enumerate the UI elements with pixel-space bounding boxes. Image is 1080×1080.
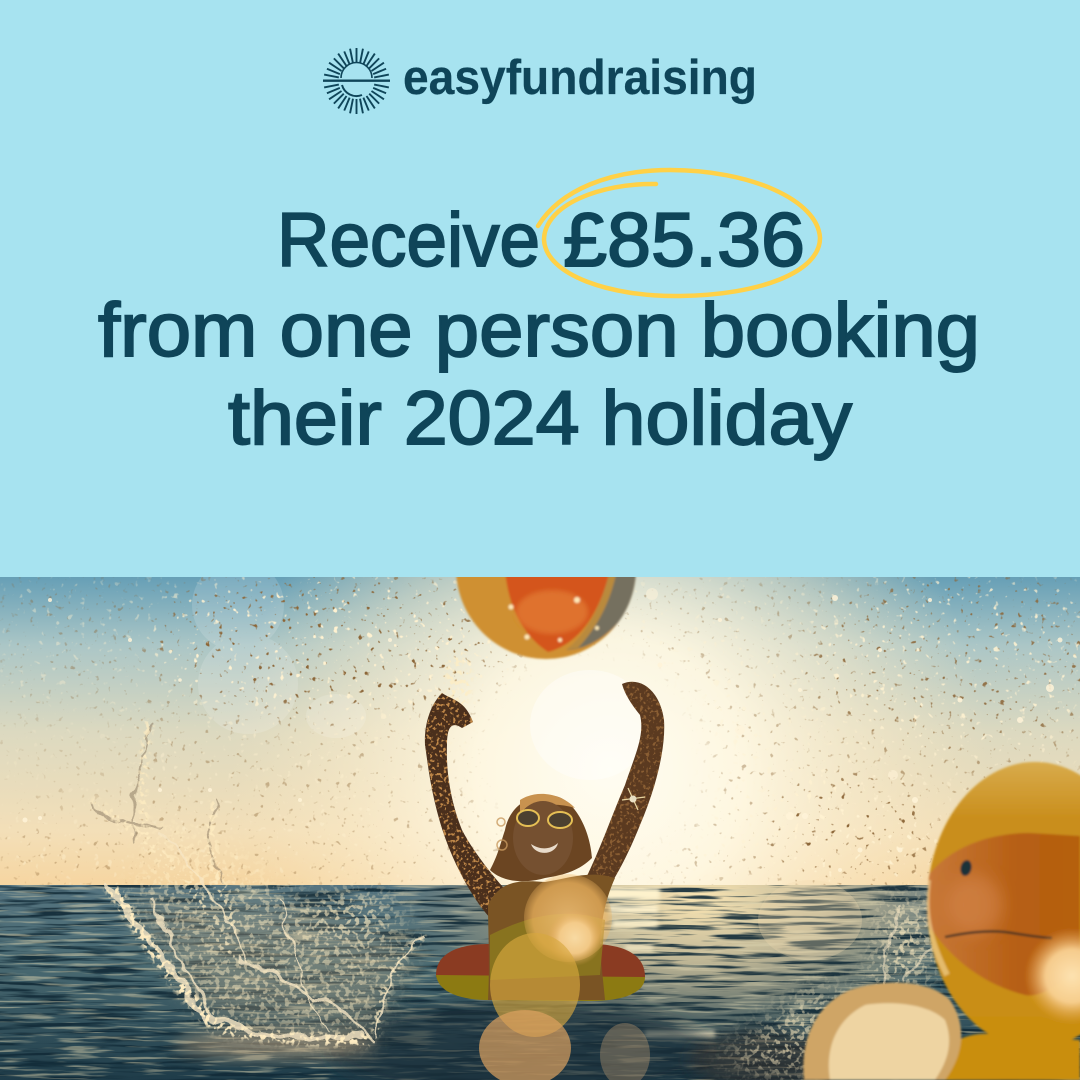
inflatable duck	[803, 762, 1080, 1080]
duck face band	[925, 833, 1080, 995]
larger droplets	[22, 588, 1062, 872]
arm droplets	[425, 682, 664, 910]
logo: easyfundraising	[323, 48, 757, 114]
sunglasses	[517, 810, 572, 828]
inflatable ring	[436, 944, 645, 1001]
dark water under the child	[330, 1000, 710, 1080]
left arm	[425, 693, 515, 925]
sea waves	[0, 885, 1080, 1080]
smile	[531, 843, 558, 853]
child	[424, 682, 664, 1001]
sky	[0, 577, 1080, 887]
wordmark: easyfundraising	[403, 51, 757, 105]
beach ball	[454, 577, 637, 661]
water droplets, fine	[0, 577, 1080, 887]
icon: sun rays	[323, 48, 390, 114]
hand-drawn circle around amount	[538, 170, 820, 296]
right arm	[585, 682, 664, 900]
duck mouth	[945, 931, 1052, 938]
water glints	[606, 888, 715, 1038]
headline	[98, 198, 980, 461]
left water splash	[92, 725, 425, 1059]
torso	[488, 875, 615, 1000]
duck flare	[1024, 928, 1080, 1024]
headline line 1: Receive	[277, 198, 540, 283]
duck body	[930, 1034, 1080, 1080]
sun glare on water	[418, 885, 938, 1034]
splash droplets	[90, 656, 945, 1080]
duck head	[927, 762, 1080, 1048]
photo: child playing in the sea at sunset	[0, 577, 1080, 1080]
hair	[490, 796, 592, 881]
pale flare behind child	[530, 670, 640, 766]
headline line 3: their 2024 holiday	[228, 376, 852, 461]
face	[513, 801, 573, 875]
sun star on arm	[622, 788, 645, 810]
duck wing	[803, 983, 961, 1080]
ball red stripe	[505, 570, 610, 652]
sun glow	[276, 577, 947, 885]
lens flares	[479, 874, 862, 1080]
right water splash	[885, 905, 935, 985]
hair curls	[497, 818, 507, 850]
bokeh in sky	[192, 577, 322, 736]
headline line 2: from one person booking	[98, 288, 980, 373]
duck eye	[959, 859, 973, 877]
sea	[0, 885, 1080, 1080]
background panel	[0, 0, 1080, 577]
ball grey stripe	[568, 577, 637, 650]
amount: £85.36	[563, 198, 805, 283]
